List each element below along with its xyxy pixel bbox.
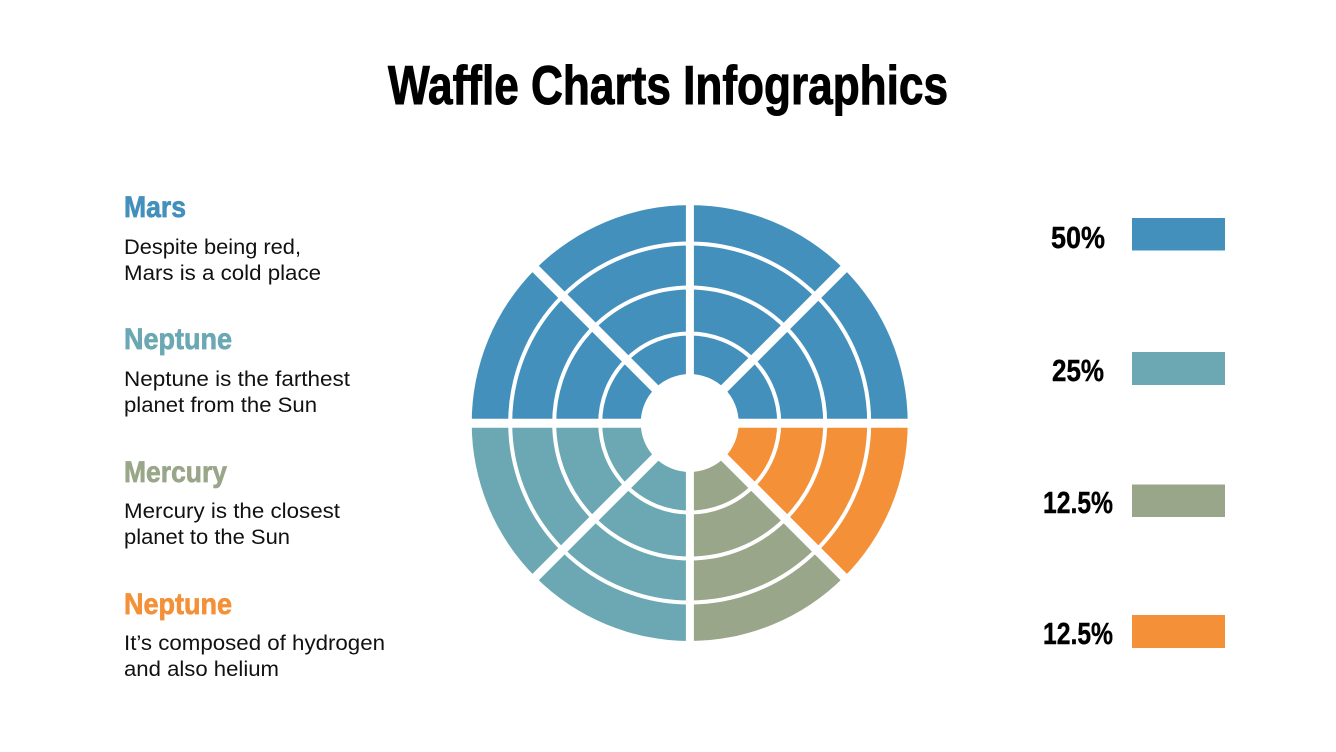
- ring dividers: [510, 244, 869, 602]
- legend row: 50%: [1051, 218, 1225, 255]
- legend row: 12.5% olive: 12.5%: [1043, 485, 1113, 520]
- text block: Mars: Despite being red,: [124, 235, 301, 259]
- segment: teal 25%: [472, 423, 690, 641]
- text block: Neptune (orange): and also helium: [124, 657, 279, 681]
- text block: Mercury: Mercury: [124, 456, 227, 489]
- text block: Neptune (teal): planet from the Sun: [124, 393, 317, 417]
- legend row: 12.5% orange: [1043, 615, 1225, 651]
- text block: Neptune (teal): [124, 323, 350, 417]
- text block: Mercury: Mercury is the closest: [124, 499, 340, 523]
- text block: Mercury: planet to the Sun: [124, 525, 290, 549]
- segment: orange 12.5%: [690, 423, 908, 577]
- segment: olive 12.5%: [690, 423, 844, 641]
- panel: percentage legend: [1043, 218, 1225, 651]
- chart: radial waffle chart: [466, 200, 913, 646]
- text block: Neptune (orange): It’s composed of hydrogen: [124, 631, 385, 655]
- text block: Mars: Mars: [124, 191, 186, 224]
- text block: Mercury: [124, 456, 340, 549]
- legend row: 12.5% olive: [1043, 484, 1225, 520]
- text block: Neptune (teal): Neptune is the farthest: [124, 367, 350, 391]
- segment: blue 50%: [472, 205, 908, 423]
- title: Waffle Charts Infographics: [388, 54, 948, 116]
- spoke dividers: [466, 200, 913, 646]
- center hole: [641, 374, 739, 472]
- legend row: 25%: 25%: [1052, 353, 1104, 388]
- legend row: 25%: [1052, 352, 1225, 388]
- text block: Mars: Mars is a cold place: [124, 261, 321, 285]
- text block: Neptune (orange): Neptune: [124, 588, 232, 621]
- text block: Neptune (orange): [124, 588, 385, 681]
- legend row: 12.5% orange: 12.5%: [1043, 616, 1113, 651]
- text block: Mars: [124, 191, 321, 285]
- legend row: 50%: 50%: [1051, 220, 1105, 255]
- panel: legend descriptions: [124, 191, 385, 681]
- text block: Neptune (teal): Neptune: [124, 323, 232, 356]
